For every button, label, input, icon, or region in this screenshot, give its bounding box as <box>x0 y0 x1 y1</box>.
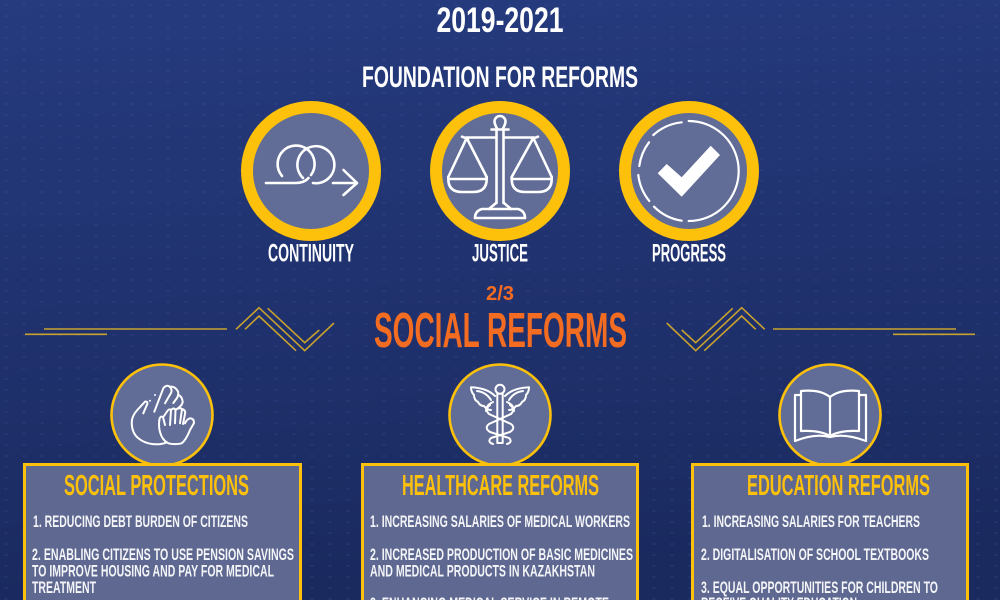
text: protections list: TREATMENT <box>32 578 96 597</box>
panel: education reforms <box>692 464 968 600</box>
section counter: 2/3 <box>486 283 514 305</box>
text: healthcare list: 2. INCREASED PRODUCTION OF BASIC MEDICINES <box>370 545 633 564</box>
label: justice: JUSTICE <box>472 240 528 268</box>
icon: hands <box>112 364 212 466</box>
text: protections list: TO IMPROVE HOUSING AND PAY FOR MEDICAL <box>32 562 274 580</box>
icon: progress check <box>625 107 753 235</box>
text: education list <box>701 512 938 600</box>
panel: healthcare reforms <box>362 464 638 600</box>
text: protections list <box>32 512 294 597</box>
icon: continuity <box>247 107 375 235</box>
label: continuity: CONTINUITY <box>268 240 354 268</box>
text: healthcare list: AND MEDICAL PRODUCTS IN KAZAKHSTAN <box>370 562 595 580</box>
text: healthcare list <box>370 512 633 600</box>
icon: caduceus <box>450 364 550 466</box>
text: healthcare list: 1. INCREASING SALARIES OF MEDICAL WORKERS <box>370 512 630 531</box>
heading: healthcare reforms: HEALTHCARE REFORMS <box>402 470 599 502</box>
icon: book <box>780 364 880 466</box>
title: years: 2019-2021 <box>436 1 564 40</box>
label: progress: PROGRESS <box>652 240 726 268</box>
text: protections list: 2. ENABLING CITIZENS TO USE PENSION SAVINGS <box>32 545 294 564</box>
heading: social protections: SOCIAL PROTECTIONS <box>64 470 249 502</box>
icon: justice scales <box>436 107 564 235</box>
heading: foundation for reforms: FOUNDATION FOR REFORMS <box>362 61 638 94</box>
heading: social reforms: SOCIAL REFORMS <box>374 304 627 358</box>
text: protections list: 1. REDUCING DEBT BURDEN OF CITIZENS <box>33 512 248 531</box>
panel: social protections <box>24 464 300 600</box>
